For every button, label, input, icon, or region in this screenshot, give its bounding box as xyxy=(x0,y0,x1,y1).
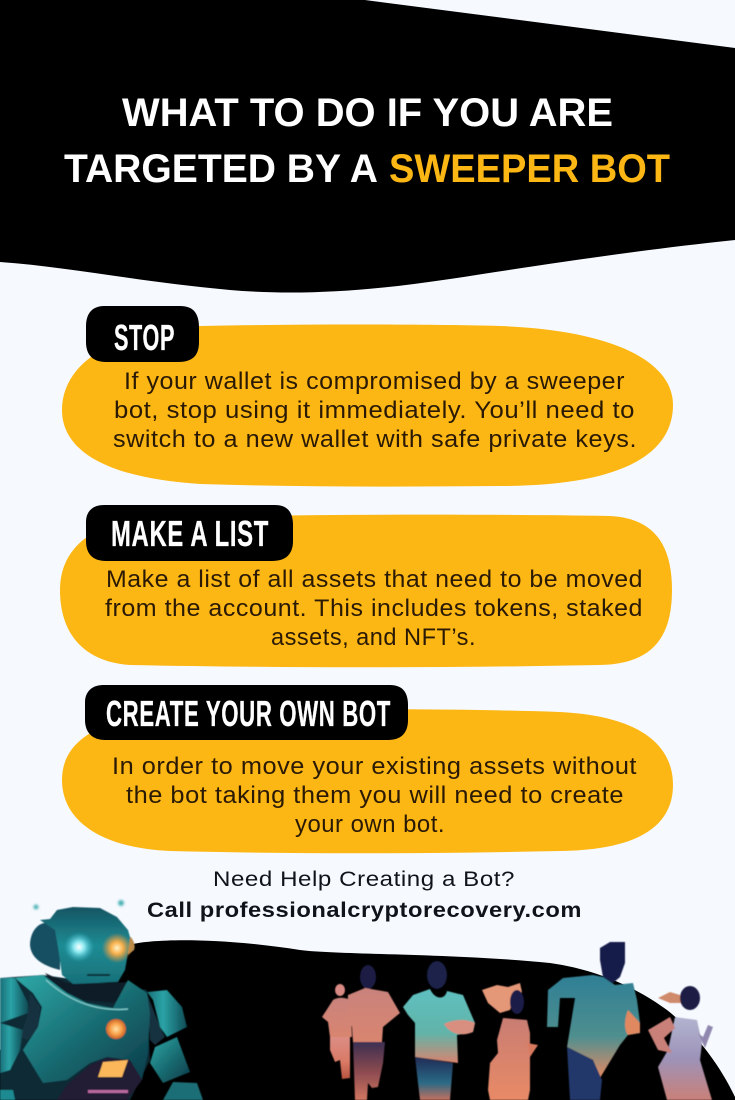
illustration: robot xyxy=(0,900,203,1100)
text: stop: bot, stop using it immediately. You’ll need to xyxy=(114,397,635,424)
label: make a list: MAKE A LIST xyxy=(111,513,269,554)
runner 1 xyxy=(322,984,352,1079)
top black header shape xyxy=(0,0,735,293)
head xyxy=(40,907,130,984)
title: WHAT TO DO IF YOU ARE xyxy=(122,91,613,135)
text: stop: switch to a new wallet with safe private keys. xyxy=(113,426,637,453)
neck xyxy=(45,973,127,1003)
chest button xyxy=(106,1019,126,1039)
label: create your own bot xyxy=(85,685,408,740)
left arm xyxy=(0,978,40,1100)
call to action xyxy=(147,867,582,922)
ear xyxy=(30,920,135,970)
text: make a list xyxy=(105,566,643,651)
runner 5 xyxy=(547,942,640,1100)
text: stop: If your wallet is compromised by a sweeper xyxy=(124,368,625,395)
label: create your own bot: CREATE YOUR OWN BOT xyxy=(106,693,391,734)
title: TARGETED BY A xyxy=(64,147,378,191)
text: create your own bot: the bot taking them you will need to create xyxy=(126,782,624,809)
antennae dots xyxy=(34,900,124,910)
title xyxy=(64,91,670,191)
runner 2 xyxy=(347,965,400,1100)
panel: make a list xyxy=(60,505,672,667)
panel: create your own bot xyxy=(62,685,673,853)
panel background: stop xyxy=(62,324,673,487)
collar highlight xyxy=(46,980,128,1009)
call to action: Need Help Creating a Bot? xyxy=(213,867,515,891)
text: make a list: from the account. This includes tokens, staked xyxy=(105,595,643,622)
text: stop xyxy=(113,368,637,453)
label: stop xyxy=(86,306,199,362)
runner 6 xyxy=(648,986,713,1100)
runner 3 xyxy=(403,961,475,1100)
call to action: Call professionalcryptorecovery.com xyxy=(147,898,582,922)
right arm xyxy=(147,990,203,1100)
text: make a list: assets, and NFT’s. xyxy=(271,624,476,651)
panel: stop xyxy=(62,306,673,487)
bottom black shape xyxy=(0,940,735,1100)
body backing xyxy=(0,975,150,1100)
panel background: create your own bot xyxy=(62,709,673,853)
lower body xyxy=(57,1058,142,1100)
runner 4 xyxy=(482,983,538,1100)
panel background: make a list xyxy=(60,515,672,667)
mouth xyxy=(87,974,110,976)
title: SWEEPER BOT xyxy=(389,147,670,191)
text: make a list: Make a list of all assets that need to be moved xyxy=(106,566,643,593)
text: create your own bot: your own bot. xyxy=(295,811,445,838)
eye: cyan xyxy=(64,932,94,962)
label: stop: STOP xyxy=(114,317,175,358)
eye: orange xyxy=(102,933,132,963)
text: create your own bot xyxy=(112,753,637,838)
torso xyxy=(15,975,150,1083)
text: create your own bot: In order to move your existing assets without xyxy=(112,753,637,780)
illustration: runners xyxy=(322,942,713,1100)
label: make a list xyxy=(86,505,293,561)
